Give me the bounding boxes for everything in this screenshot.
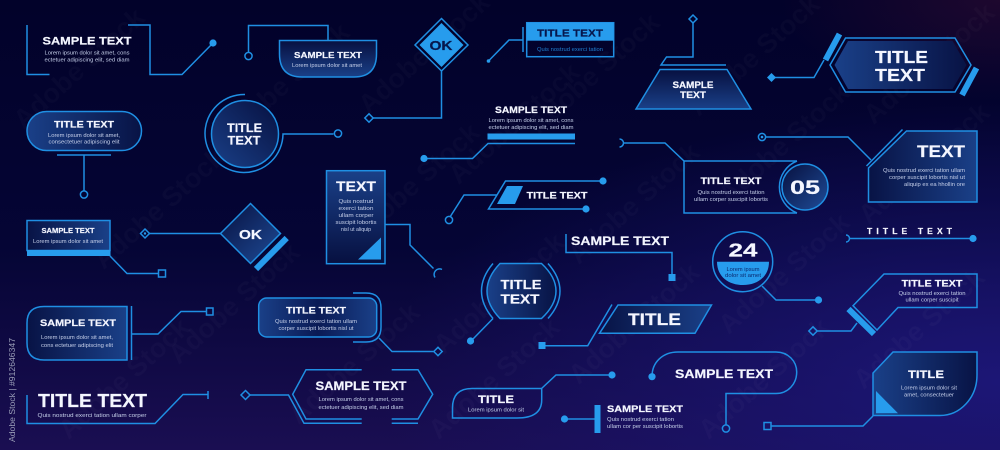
callout: number 24 circle: [713, 232, 822, 304]
callout: cut corner text box: [758, 130, 977, 202]
callout: title box bottom right: amet, consectetuer: [904, 392, 954, 398]
callout: sample text box bottom left: cons ectetuer adipiscing elit: [41, 343, 113, 349]
callout: spaced title text line: [846, 226, 977, 242]
callout: sample text with vertical bar: Quis nostrud exerci tation: [607, 417, 674, 423]
callout: rounded title text with brackets: corper suscipit lobortis nisl ut: [278, 326, 354, 332]
callout: angled title text tag: [809, 274, 977, 335]
watermark pattern: Adobe Stock: [858, 0, 1000, 130]
callout: number 05: Quis nostrud exerci tation: [698, 190, 764, 196]
callout: hexagon title text: TEXT: [875, 65, 925, 85]
callout: bracket sample text top left: [27, 25, 217, 74]
watermark pattern: Adobe Stock: [713, 206, 856, 340]
callout: number 24 circle: 24: [728, 240, 758, 260]
callout: barrel title text: TEXT: [500, 292, 540, 306]
callout: tall text box: exerci tation: [338, 206, 374, 212]
callout: hexagon title text: TITLE: [875, 47, 928, 67]
callout: large title text bottom left: TITLE TEXT: [38, 390, 148, 411]
callout: cut corner text box: TEXT: [917, 142, 966, 161]
callout: number 05: TITLE TEXT: [700, 176, 762, 186]
callout: sample text with underline: Lorem ipsum dolor sit amet, cons: [488, 118, 574, 124]
callout: pill title text: Lorem ipsum dolor sit amet,: [48, 133, 120, 139]
watermark pattern: Adobe Stock: [523, 6, 666, 140]
watermark pattern: Adobe Stock: [53, 311, 196, 445]
callout: rounded bottom sample text: [245, 26, 376, 77]
callout: small title tab: Lorem ipsum dolor sit: [468, 408, 524, 414]
callout: trapezoid sample text: [636, 15, 751, 109]
callout: blue header box: [487, 23, 614, 63]
callout: cut corner text box: corper suscipit lobortis nisl ut: [889, 175, 965, 181]
callout: tall text box: Quis nostrud: [338, 199, 374, 205]
watermark pattern: Adobe Stock: [693, 311, 836, 445]
watermark pattern: Adobe Stock: [428, 226, 571, 360]
callout: tall text box: [326, 171, 442, 278]
callout: parallelogram title: TITLE: [628, 310, 681, 329]
callout: pill title text: TITLE TEXT: [54, 120, 114, 130]
callout: barrel title text: TITLE: [500, 278, 542, 292]
callout: pill title text: consectetuer adipiscing elit: [48, 140, 120, 146]
watermark pattern: Adobe Stock: [853, 96, 996, 230]
callout: sample text with thick underline: SAMPLE TEXT: [42, 226, 95, 235]
callout: angled title text tag: Quis nostrud exerci tation: [898, 291, 966, 297]
callout: sample text with underline: [420, 105, 575, 162]
callout: small title tab: TITLE: [478, 394, 514, 406]
watermark pattern: Adobe Stock: [848, 261, 991, 395]
callout: rounded title text with brackets: [259, 293, 442, 356]
watermark pattern: Adobe Stock: [343, 116, 486, 250]
callout: title box bottom right: Lorem ipsum dolor sit: [901, 386, 957, 392]
callout: OK diamond middle: OK: [239, 227, 263, 242]
callout: circle title text: TITLE: [227, 121, 262, 135]
callout: sample text with bracket underline: SAMPLE TEXT: [571, 234, 670, 248]
callout: sample text box bottom left: SAMPLE TEXT: [40, 318, 116, 329]
callout: hexagon sample text: Lorem ipsum dolor sit amet, cons: [318, 397, 404, 403]
callout: OK diamond top: OK: [430, 39, 452, 53]
callout: title box bottom right: [764, 352, 977, 430]
callout: pill title text: [27, 112, 142, 198]
callout: hexagon title text: [767, 34, 976, 95]
callout: spaced title text line: TITLE TEXT: [867, 226, 953, 236]
callout: sample text with bracket underline: [566, 234, 676, 281]
callout: sample text with thick underline: [27, 220, 166, 277]
callout: number 05: [620, 139, 828, 213]
watermark pattern: Adobe Stock: [163, 236, 306, 370]
callout: barrel title text: [467, 264, 560, 345]
callout: rounded bottom sample text: SAMPLE TEXT: [294, 50, 363, 60]
callout: rounded bottom sample text: Lorem ipsum dolor sit amet: [292, 63, 362, 69]
callout: large title text bottom left: [27, 390, 208, 424]
watermark pattern: Adobe Stock: [423, 311, 566, 445]
callout: angled title text tag: ullam corper suscipit: [906, 298, 959, 304]
callout: tall text box: nisl ut aliquip: [341, 227, 371, 233]
callout: number 24 circle: dolor sit amet: [725, 273, 761, 279]
callout: open pill sample text: SAMPLE TEXT: [675, 367, 774, 381]
callout: circle title text: TEXT: [228, 134, 261, 148]
callout: circle title text: [205, 94, 342, 172]
callout: hexagon sample text: SAMPLE TEXT: [316, 381, 406, 393]
callout: trapezoid sample text: TEXT: [680, 90, 707, 100]
callout: blue header box: Quis nostrud exerci tation: [537, 47, 603, 53]
callout: number 05: 05: [790, 177, 820, 199]
callout: hexagon sample text: ectetuer adipiscing elit, sed diam: [318, 405, 404, 411]
callout: slanted title text: [445, 177, 607, 224]
callout: bracket sample text top left: Lorem ipsum dolor sit amet, cons: [44, 50, 130, 56]
watermark pattern: Adobe Stock: [563, 256, 706, 390]
callout: trapezoid sample text: SAMPLE: [672, 80, 714, 90]
callout: angled title text tag: TITLE TEXT: [902, 278, 963, 290]
watermark pattern: Adobe Stock: [283, 296, 426, 430]
callout: tall text box: suscipit lobortis: [336, 220, 377, 226]
callout: small title tab: [452, 371, 616, 418]
callout: parallelogram title: [538, 304, 712, 349]
callout: sample text with vertical bar: ullam cor per suscipit lobortis: [607, 424, 683, 430]
callout: tall text box: ullam corper: [338, 213, 374, 219]
callout: number 05: ullam corper suscipit lobortis: [694, 197, 768, 203]
callout: blue header box: TITLE TEXT: [537, 28, 603, 40]
callout: rounded title text with brackets: TITLE TEXT: [286, 306, 346, 316]
callout: sample text with thick underline: Lorem ipsum dolor sit amet: [33, 239, 103, 245]
callout: bracket sample text top left: ectetuer adipiscing elit, sed diam: [44, 58, 130, 64]
watermark pattern: Adobe Stock: [713, 76, 856, 210]
callout: slanted title text: TITLE TEXT: [526, 190, 588, 202]
callout: number 24 circle: Lorem ipsum: [726, 267, 760, 273]
callout: hexagon sample text: [241, 370, 433, 423]
callout: sample text with underline: SAMPLE TEXT: [495, 105, 567, 116]
watermark pattern: Adobe Stock: [443, 56, 586, 190]
watermark pattern: Adobe Stock: [88, 141, 231, 275]
watermark pattern: Adobe Stock: [213, 16, 356, 150]
callout: cut corner text box: Quis nostrud exerci tation ullam: [883, 168, 965, 174]
watermark pattern: Adobe Stock: [8, 1, 151, 135]
callout: sample text box bottom left: [27, 306, 213, 360]
watermark pattern: Adobe Stock: [563, 136, 706, 270]
callout: title box bottom right: TITLE: [908, 369, 944, 381]
callout: sample text box bottom left: Lorem ipsum dolor sit amet,: [41, 335, 113, 341]
callout: large title text bottom left: Quis nostrud exerci tation ullam corper: [38, 413, 147, 419]
callout: open pill sample text: [648, 352, 797, 432]
callout: sample text with vertical bar: SAMPLE TEXT: [607, 404, 683, 415]
callout: tall text box: TEXT: [336, 179, 377, 194]
callout: rounded title text with brackets: Quis nostrud exerci tation ullam: [275, 319, 357, 325]
callout: bracket sample text top left: SAMPLE TEXT: [42, 36, 132, 48]
callout: sample text with underline: ectetuer adipiscing elit, sed diam: [488, 125, 574, 131]
vertical stock id text: Adobe Stock | #912646347: [7, 338, 17, 442]
callout: OK diamond top: [365, 18, 468, 122]
callout: cut corner text box: aliquip ex ea hhollin ore: [904, 182, 965, 188]
callout: sample text with vertical bar: [561, 404, 683, 433]
callout: OK diamond middle: [140, 204, 287, 269]
